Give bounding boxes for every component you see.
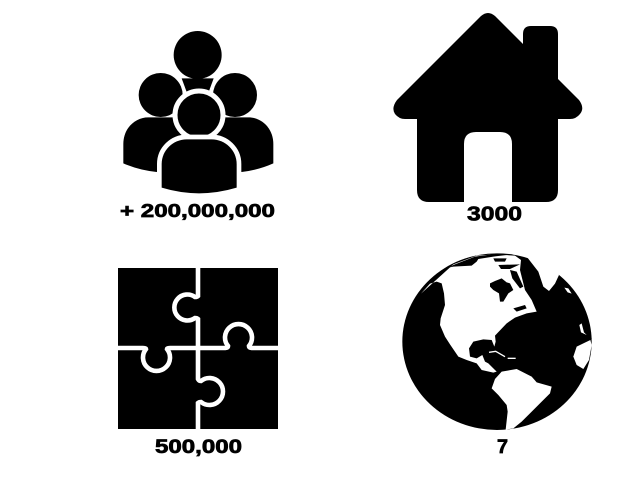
continent: north america [421, 254, 537, 373]
continent: africa and europe [573, 340, 592, 369]
icon: puzzle [118, 268, 278, 429]
person: back left [123, 73, 183, 172]
continent: south america [492, 369, 552, 430]
continent: greenland [527, 257, 559, 291]
person: top head and neck [174, 31, 222, 92]
caribbean islands [489, 351, 516, 358]
icon: globe [402, 253, 592, 430]
arctic, hudson bay and sea details [437, 254, 592, 339]
label: house count: 3000 [467, 202, 522, 226]
person: back right [213, 73, 273, 172]
puzzle seams [118, 268, 278, 429]
label: globe count: 7 [497, 437, 508, 458]
person: front [162, 91, 237, 193]
label: people count: + 200,000,000 [120, 201, 275, 221]
icon: group of people [123, 31, 273, 193]
icon: house [393, 13, 582, 202]
label: puzzle count: 500,000 [155, 437, 242, 458]
puzzle pieces background [118, 268, 278, 429]
continents [421, 254, 592, 430]
globe disc [402, 253, 592, 430]
